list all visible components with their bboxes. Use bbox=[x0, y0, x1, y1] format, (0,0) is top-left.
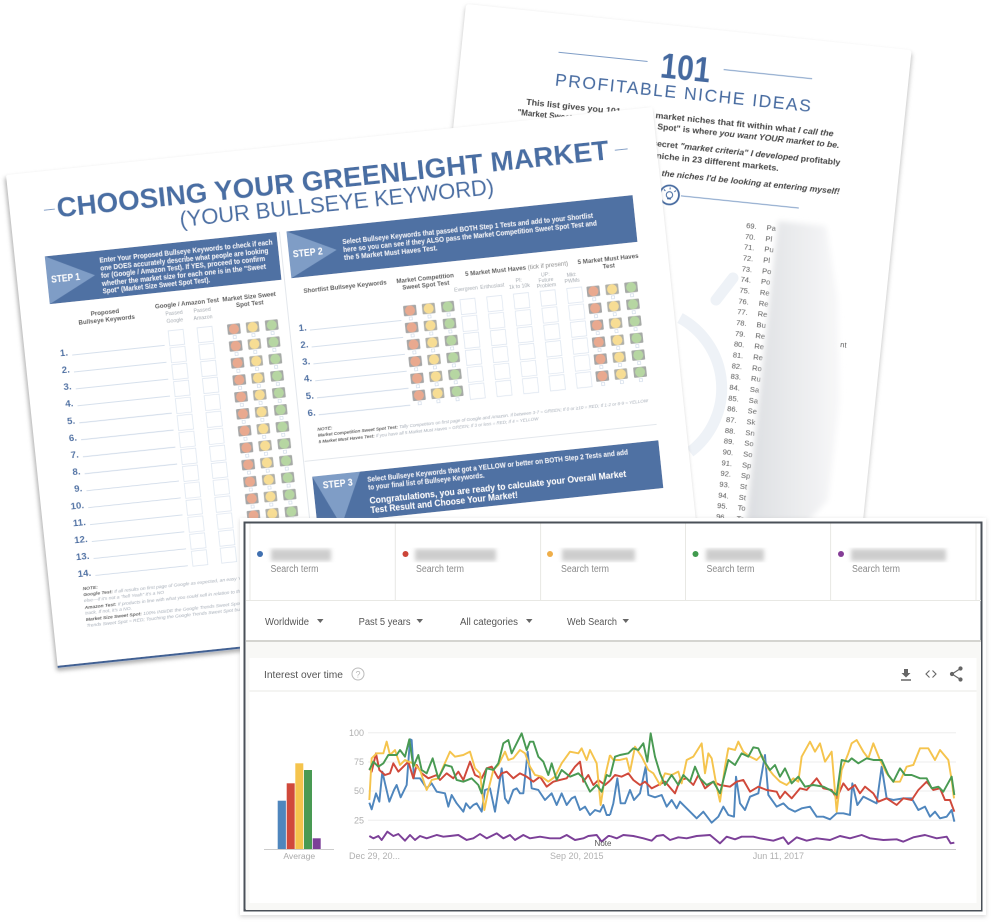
list numbers and niches: Re bbox=[759, 288, 770, 298]
average bar chart bbox=[264, 763, 334, 861]
step 2 note: NOTE: bbox=[317, 425, 333, 433]
filter row: Worldwide bbox=[265, 617, 309, 628]
intro text: "Market Sweet bbox=[517, 108, 573, 123]
list numbers and niches: Ro bbox=[752, 363, 762, 373]
search term cards: Search term bbox=[416, 564, 464, 575]
step 2 column headers: Enthusiast bbox=[480, 282, 505, 291]
list numbers and niches: 82. bbox=[731, 361, 743, 371]
list numbers and niches: Re bbox=[753, 352, 763, 362]
icon: embed bbox=[926, 670, 936, 678]
heading: profitable niche ideas: PROFITABLE NICHE IDEAS bbox=[554, 70, 812, 116]
step 1 keyword lines bbox=[72, 345, 188, 575]
step 2 column headers: UP: bbox=[541, 272, 550, 279]
step 1 note: track. If not, it's a NO. bbox=[85, 606, 132, 617]
step 1 checkbox columns bbox=[168, 326, 237, 566]
step 2 banner: Select Bullseye Keywords that passed BOTH Step 1 Tests and add to your Shortlist bbox=[342, 211, 594, 246]
card divider bbox=[250, 690, 976, 692]
heading: interest over time: Interest over time bbox=[264, 669, 343, 681]
list numbers and niches: 86. bbox=[727, 404, 738, 414]
step 1 banner: STEP 1 bbox=[51, 272, 81, 286]
step 1 banner: Enter Your Proposed Bullseye Keywords to check if each bbox=[99, 238, 273, 265]
chart gridlines and labels: Dec 29, 20... bbox=[349, 851, 400, 861]
list numbers and niches: Se bbox=[747, 406, 757, 416]
watermark: faded bulb icon bbox=[680, 278, 733, 452]
list numbers and niches: 81. bbox=[732, 350, 744, 360]
filter row: Past 5 years bbox=[359, 617, 411, 628]
chart gridlines and labels: 100 bbox=[349, 728, 364, 738]
step 1 row numbers: 3. bbox=[63, 381, 72, 393]
step 3 banner: to your final list of Bullseye Keywords. bbox=[368, 471, 485, 492]
step 1 column headers: Google bbox=[166, 317, 184, 325]
step 1 banner bbox=[45, 232, 281, 304]
step 2 column headers: Evergreen bbox=[454, 285, 478, 294]
blurred niche names bbox=[746, 221, 840, 528]
step 1 row numbers: 2. bbox=[61, 364, 70, 376]
list numbers and niches: Sa bbox=[748, 395, 759, 405]
intro text: Spot" is where you want YOUR market to be. bbox=[657, 122, 840, 150]
step 2 keyword lines bbox=[310, 320, 410, 415]
intro text: niche in 23 different markets. bbox=[656, 151, 779, 173]
step 1 row numbers: 12. bbox=[74, 534, 88, 546]
step 1 note: else—if it's not a "hell Yeah" it's a NO bbox=[84, 590, 165, 604]
step 1 column headers: Proposed bbox=[90, 308, 120, 318]
list numbers and niches bbox=[716, 221, 777, 524]
list numbers and niches: 87. bbox=[726, 415, 737, 425]
step 1 note: Market Size Sweet Spot: 100% INSIDE the Google Trends Sweet Spot = GREEN; Outside bbox=[86, 596, 284, 623]
step 1 row numbers bbox=[54, 348, 92, 580]
list numbers and niches: 79. bbox=[735, 329, 746, 339]
step 2 column headers: PWMs bbox=[564, 278, 581, 285]
step 1 row numbers: 10. bbox=[70, 500, 85, 513]
step 2 row numbers: 4. bbox=[303, 373, 313, 385]
list numbers and niches: Re bbox=[754, 342, 764, 352]
list numbers and niches: Re bbox=[757, 309, 768, 319]
step 1 note: Trends Sweet Spot = RED; Touching the Google Trends Sweet Spot but dipping = YELLOW bbox=[86, 602, 285, 629]
step 2 column headers: 1k to 10k bbox=[509, 283, 531, 291]
list numbers and niches: St bbox=[738, 492, 747, 502]
list numbers and niches: 75. bbox=[739, 286, 750, 296]
step 1 row numbers: 7. bbox=[70, 449, 79, 461]
list numbers and niches: 77. bbox=[737, 307, 748, 317]
search term cards: Search term bbox=[852, 564, 900, 575]
step 2 column headers: Test bbox=[602, 262, 615, 271]
step 2 column headers: 5 Market Must Haves bbox=[577, 253, 639, 266]
step 1 row numbers: 13. bbox=[75, 551, 90, 563]
list numbers and niches: Pl bbox=[765, 234, 773, 244]
step 1 row numbers: 14. bbox=[77, 568, 92, 580]
list numbers and niches: 92. bbox=[720, 469, 732, 479]
chart series bbox=[369, 733, 954, 844]
step 1 row numbers: 1. bbox=[59, 348, 69, 359]
list numbers and niches: 84. bbox=[729, 383, 740, 393]
step 1 banner: one DOES accurately describe what people are looking bbox=[100, 246, 269, 272]
list numbers and niches: Pa bbox=[766, 223, 777, 233]
list numbers and niches: 89. bbox=[723, 436, 735, 446]
step 1 column headers: Google / Amazon Test bbox=[155, 297, 219, 311]
list numbers and niches: 74. bbox=[740, 275, 752, 285]
step 1 banner: whether the market size for each one is in the "Sweet bbox=[101, 262, 267, 288]
step 1 traffic lights bbox=[227, 319, 302, 560]
step 3 banner: Test Result and Choose Your Market! bbox=[370, 490, 518, 515]
list numbers and niches: Re bbox=[755, 331, 766, 341]
step 1 banner: for (Google / Amazon Test). If YES, proceed to confirm bbox=[101, 254, 266, 280]
step 2 note: 5 Market Must Haves Test: If you have all 5 Market Must Haves = GREEN; If 3 or less = RED; If 4 = YELLOW bbox=[318, 416, 539, 445]
list numbers and niches: 69. bbox=[746, 221, 757, 231]
list numbers and niches: So bbox=[743, 449, 753, 459]
chart gridlines and labels: Jun 11, 2017 bbox=[753, 851, 804, 861]
list numbers and niches: 88. bbox=[725, 426, 736, 436]
filter divider bbox=[246, 640, 981, 642]
list numbers and niches: St bbox=[739, 482, 748, 491]
chart gridlines and labels: 50 bbox=[354, 786, 364, 796]
title: CHOOSING YOUR GREENLIGHT MARKET bbox=[55, 134, 610, 223]
step 2 competition lights bbox=[403, 301, 464, 405]
chart gridlines and labels: 75 bbox=[354, 757, 364, 767]
chart gridlines and labels bbox=[349, 728, 956, 861]
list numbers and niches: Sp bbox=[742, 460, 752, 470]
step 2 column headers: Future bbox=[538, 277, 554, 284]
step 2 row numbers: 6. bbox=[307, 407, 316, 419]
step 1 note bbox=[81, 563, 305, 629]
step 2 row numbers: 5. bbox=[305, 390, 314, 402]
list numbers and niches: To bbox=[737, 503, 746, 513]
line chart bbox=[349, 728, 956, 861]
step 2 column headers bbox=[303, 253, 642, 314]
search term cards: Search term bbox=[561, 564, 609, 575]
step 2 column headers: 5 Market Must Haves (tick if present) bbox=[465, 260, 568, 278]
step 2 column headers: Shortlist Bullseye Keywords bbox=[303, 279, 388, 295]
step 2 must haves lights bbox=[586, 281, 648, 386]
list numbers and niches: 95. bbox=[717, 501, 728, 511]
list numbers and niches: 90. bbox=[722, 447, 734, 457]
list numbers and niches: Pu bbox=[764, 245, 774, 255]
filter row bbox=[265, 617, 629, 628]
step 1 row numbers: 4. bbox=[65, 398, 74, 410]
list numbers and niches: 76. bbox=[738, 296, 749, 306]
heading: 101: 101 bbox=[659, 46, 712, 90]
step 3 banner: Congratulations, you are ready to calculate your Overall Market bbox=[369, 469, 627, 506]
list numbers and niches: 78. bbox=[736, 318, 747, 328]
step 2 row numbers bbox=[298, 322, 316, 419]
step 2 row numbers: 1. bbox=[298, 322, 307, 334]
step 2 column headers: Sweet Spot Test bbox=[402, 280, 450, 292]
niche list fragment: nt bbox=[840, 340, 848, 350]
step 1 row numbers: 9. bbox=[74, 483, 83, 495]
list numbers and niches: Ru bbox=[751, 374, 761, 384]
list numbers and niches: Po bbox=[761, 277, 771, 287]
search term cards: Search term bbox=[270, 564, 318, 575]
list numbers and niches: 91. bbox=[721, 458, 733, 468]
list numbers and niches: 94. bbox=[718, 490, 729, 500]
step 1 column headers: Spot Test bbox=[236, 299, 264, 309]
step 3 banner: Select Bullseye Keywords that got a YELLOW or better on BOTH Step 2 Tests and add bbox=[367, 448, 629, 484]
step 1 column headers bbox=[77, 291, 278, 334]
list numbers and niches: Sk bbox=[746, 417, 756, 427]
intro text: market niches that fit within what I call the bbox=[655, 111, 835, 139]
heading rule left bbox=[559, 52, 648, 61]
icon: lightbulb badge bbox=[659, 184, 680, 205]
step 2 checkbox columns bbox=[460, 287, 592, 399]
list numbers and niches: Sn bbox=[745, 428, 755, 438]
title dashes bbox=[44, 149, 628, 210]
step 2 column headers: Market Competition bbox=[396, 272, 454, 285]
chart gridlines and labels: 25 bbox=[354, 816, 364, 826]
divider rule bbox=[681, 196, 799, 208]
step 1 row numbers: 8. bbox=[72, 466, 81, 478]
intro text: secret "market criteria" I developed profitably bbox=[652, 139, 841, 167]
icon: share bbox=[950, 667, 962, 681]
intro text: the niches I'd be looking at entering myself! bbox=[661, 169, 840, 196]
step 1 column headers: Market Size Sweet bbox=[222, 291, 276, 304]
list numbers and niches: Sp bbox=[741, 471, 751, 481]
icon: download bbox=[901, 669, 911, 681]
list numbers and niches: 93. bbox=[719, 480, 730, 490]
list numbers and niches: 71. bbox=[743, 243, 755, 253]
list numbers and niches: 85. bbox=[728, 393, 739, 403]
step 2 column headers: Mkt: bbox=[566, 272, 577, 279]
step 1 column headers: Bullseye Keywords bbox=[78, 314, 136, 327]
average bar chart: Average bbox=[283, 851, 315, 861]
list numbers and niches: Po bbox=[762, 266, 772, 276]
step 2 banner bbox=[286, 195, 637, 278]
heading rule right bbox=[724, 70, 812, 79]
step 1 row numbers: 11. bbox=[72, 517, 86, 529]
list numbers and niches: 73. bbox=[741, 264, 753, 274]
list numbers and niches: Bu bbox=[756, 320, 766, 330]
icon: help bbox=[352, 668, 364, 680]
google trends panel bbox=[240, 518, 986, 917]
step 1 note: Google Test: If all results on first page of Google as expected, an easy YES, otherwise check further bbox=[83, 570, 301, 598]
chart annotation: note: Note bbox=[595, 839, 612, 848]
list numbers and niches: So bbox=[744, 439, 754, 448]
divider between steps bbox=[279, 195, 675, 640]
list numbers and niches: 72. bbox=[742, 253, 754, 263]
list numbers and niches: 96. bbox=[716, 512, 727, 522]
step 2 banner: the 5 Market Must Haves Test. bbox=[344, 243, 438, 262]
step 2 note: Market Competition Sweet Spot Test: Tally Competitors on first page of Google and Amazon. If between 3-7 = GREEN; If 0 or ≥10 = RED; If 1-2 or 8-9 = YELLOW bbox=[318, 398, 649, 439]
panel background bbox=[246, 642, 981, 910]
step 1 banner: Spot" (Market Size Sweet Spot Test). bbox=[102, 275, 211, 296]
step 3 banner bbox=[312, 440, 664, 528]
list numbers and niches: 70. bbox=[745, 232, 756, 242]
step 2 row numbers: 3. bbox=[302, 356, 311, 368]
title: (YOUR BULLSEYE KEYWORD) bbox=[178, 174, 495, 232]
intro text: This list gives you 101 bbox=[526, 98, 622, 117]
step 3 banner: STEP 3 bbox=[322, 477, 354, 492]
step 1 column headers: Passed bbox=[165, 310, 183, 318]
step 1 note: NOTE: bbox=[82, 585, 99, 592]
chart gridlines and labels: Sep 20, 2015 bbox=[550, 851, 604, 861]
step 2 banner: here so you can see if they ALSO pass the Market Competition Sweet Spot Test and bbox=[343, 219, 598, 254]
bottom accent bbox=[58, 598, 704, 668]
filter row: Web Search bbox=[567, 617, 617, 628]
sheet: choosing your greenlight market bbox=[5, 107, 704, 671]
blurred search terms bbox=[271, 549, 946, 561]
step 1 note: Amazon Test: If products in line with what you could sell in relation to this Keyword are on the right bbox=[83, 583, 299, 611]
step 2 row numbers: 2. bbox=[300, 339, 309, 351]
search term cards: Search term bbox=[706, 564, 754, 575]
step 2 banner: STEP 2 bbox=[292, 246, 324, 260]
list numbers and niches: Re bbox=[758, 299, 769, 308]
list numbers and niches: To bbox=[736, 514, 745, 524]
list numbers and niches: 80. bbox=[733, 339, 745, 350]
intro text bbox=[512, 97, 846, 196]
icon: help: ? bbox=[355, 670, 361, 680]
list numbers and niches: Sa bbox=[749, 385, 760, 395]
search term cards bbox=[246, 524, 981, 600]
step 2 column headers: PI: bbox=[515, 278, 522, 284]
list numbers and niches: Pl bbox=[763, 255, 771, 265]
filter row: All categories bbox=[460, 617, 518, 628]
step 1 row numbers: 6. bbox=[68, 432, 77, 444]
list numbers and niches: 83. bbox=[730, 372, 742, 382]
sheet: 101 profitable niche ideas bbox=[407, 4, 912, 610]
step 1 row numbers: 5. bbox=[67, 415, 76, 427]
step 1 column headers: Passed bbox=[193, 307, 211, 315]
step 2 column headers: Problem bbox=[537, 282, 556, 290]
step 1 column headers: Amazon bbox=[193, 314, 213, 322]
